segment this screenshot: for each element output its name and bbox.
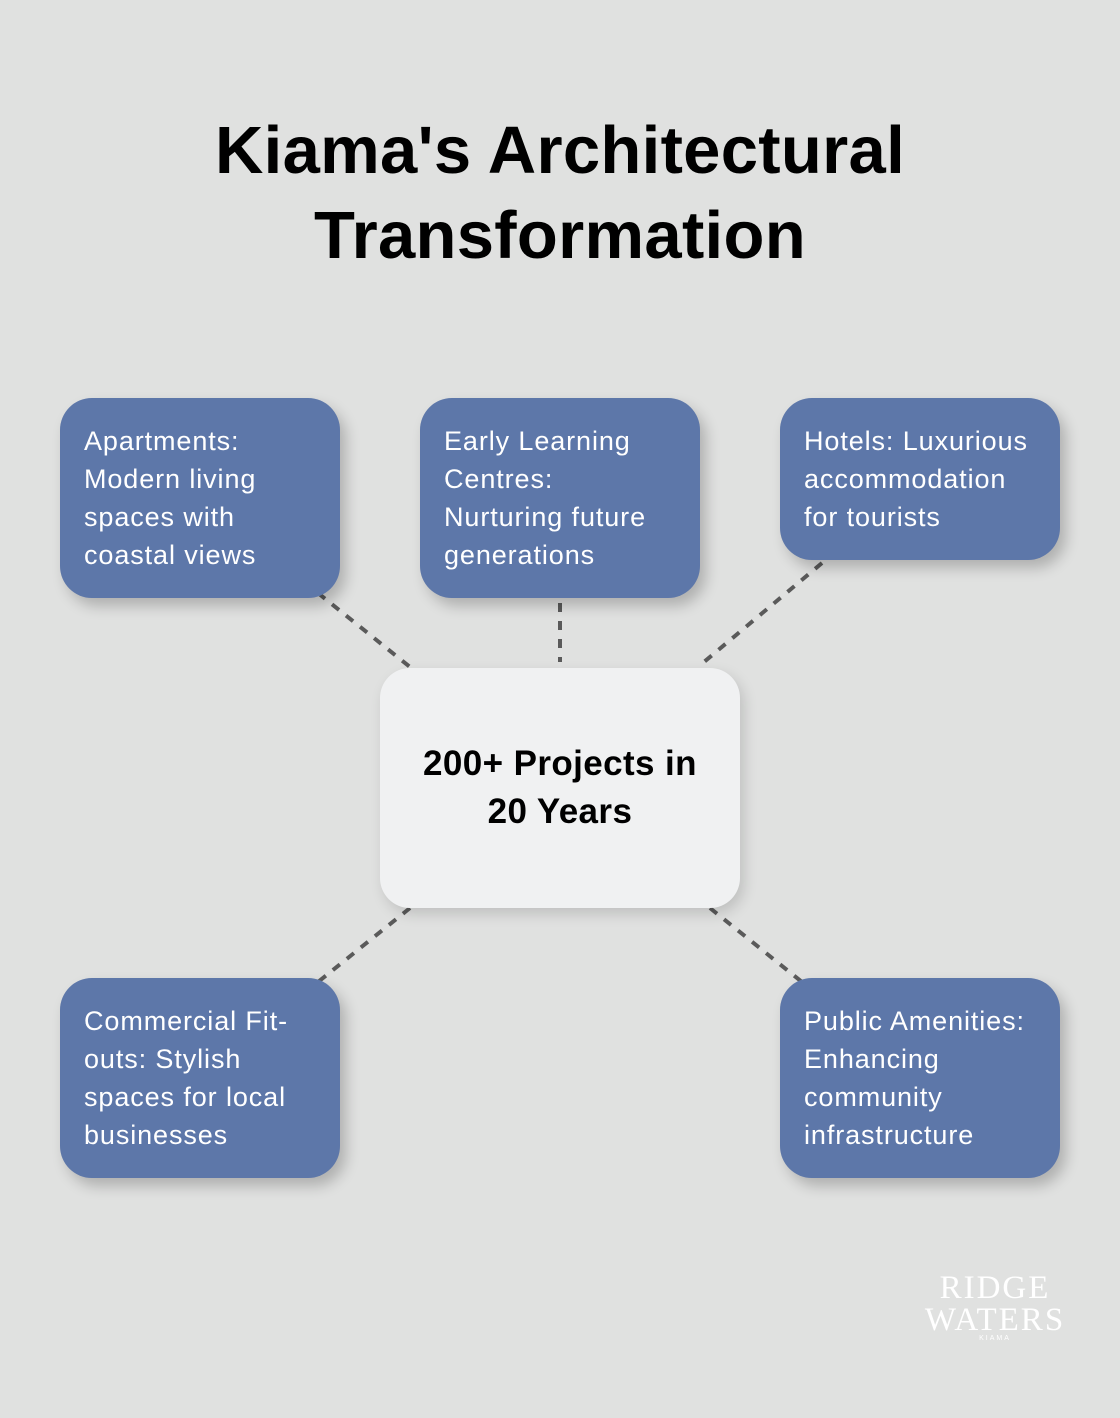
box: hotels: accommodation [804, 464, 1006, 494]
box: apartments: spaces with [84, 502, 235, 532]
box: hotels: Hotels: Luxurious [804, 426, 1028, 456]
box: commercial: spaces for local [84, 1082, 286, 1112]
box: public amenities [780, 978, 1060, 1178]
box: commercial: outs: Stylish [84, 1044, 241, 1074]
box: commercial [60, 978, 340, 1178]
center box: 20 Years [488, 792, 632, 831]
box: commercial: businesses [84, 1120, 228, 1150]
logo: RIDGE [940, 1270, 1050, 1306]
box: public amenities: community [804, 1082, 943, 1112]
center box: 200+ Projects in [423, 744, 697, 783]
title: Transformation [314, 198, 806, 273]
box: apartments: Modern living [84, 464, 256, 494]
center box [380, 668, 740, 908]
box: early learning [420, 398, 700, 598]
box: early learning: Early Learning [444, 426, 631, 456]
box: early learning: Centres: [444, 464, 553, 494]
box: apartments: Apartments: [84, 426, 239, 456]
box: public amenities: Public Amenities: [804, 1006, 1025, 1036]
box: commercial: Commercial Fit- [84, 1006, 288, 1036]
box: hotels: for tourists [804, 502, 941, 532]
logo: KIAMA [979, 1335, 1011, 1342]
box: hotels [780, 398, 1060, 560]
title [215, 113, 905, 273]
box: public amenities: Enhancing [804, 1044, 940, 1074]
logo: WATERS [925, 1302, 1065, 1338]
box: apartments: coastal views [84, 540, 256, 570]
box: public amenities: infrastructure [804, 1120, 974, 1150]
box: apartments [60, 398, 340, 598]
logo [925, 1270, 1065, 1342]
box: early learning: generations [444, 540, 595, 570]
box: early learning: Nurturing future [444, 502, 646, 532]
title: Kiama's Architectural [215, 113, 905, 188]
